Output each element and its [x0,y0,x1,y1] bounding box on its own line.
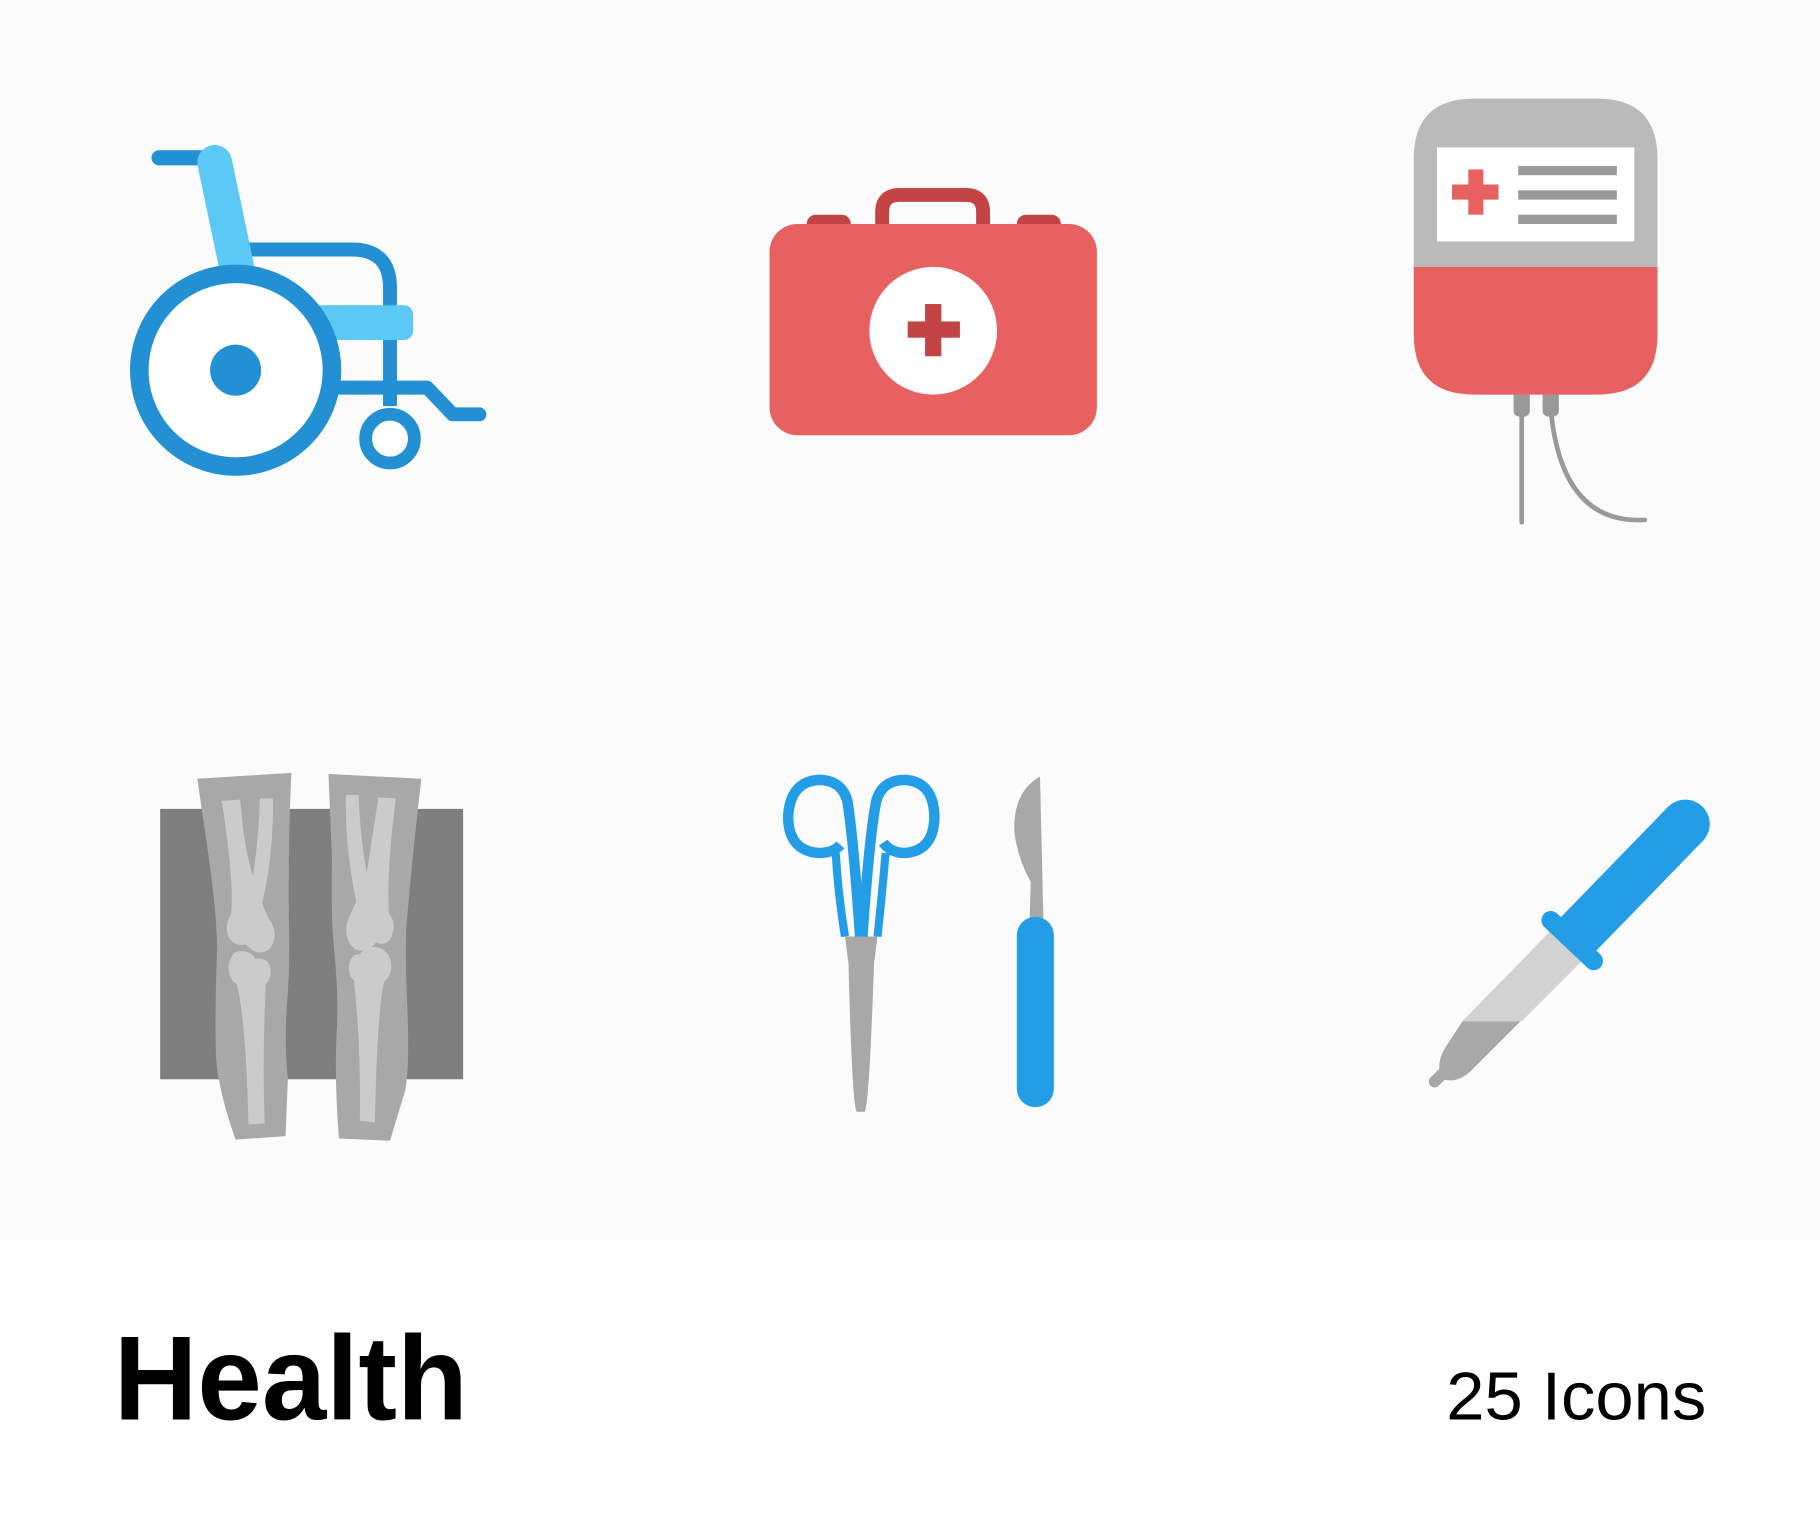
icon: blood bag [1414,99,1658,522]
icon: scissors and scalpel [788,776,1054,1112]
icon: dropper [1435,800,1710,1082]
icon: x-ray legs [160,773,463,1141]
icon: wheelchair [139,158,479,467]
subtitle: icon count: 25 Icons [1446,1359,1706,1434]
icon: first aid kit [770,195,1097,435]
title: Health [114,1312,468,1445]
